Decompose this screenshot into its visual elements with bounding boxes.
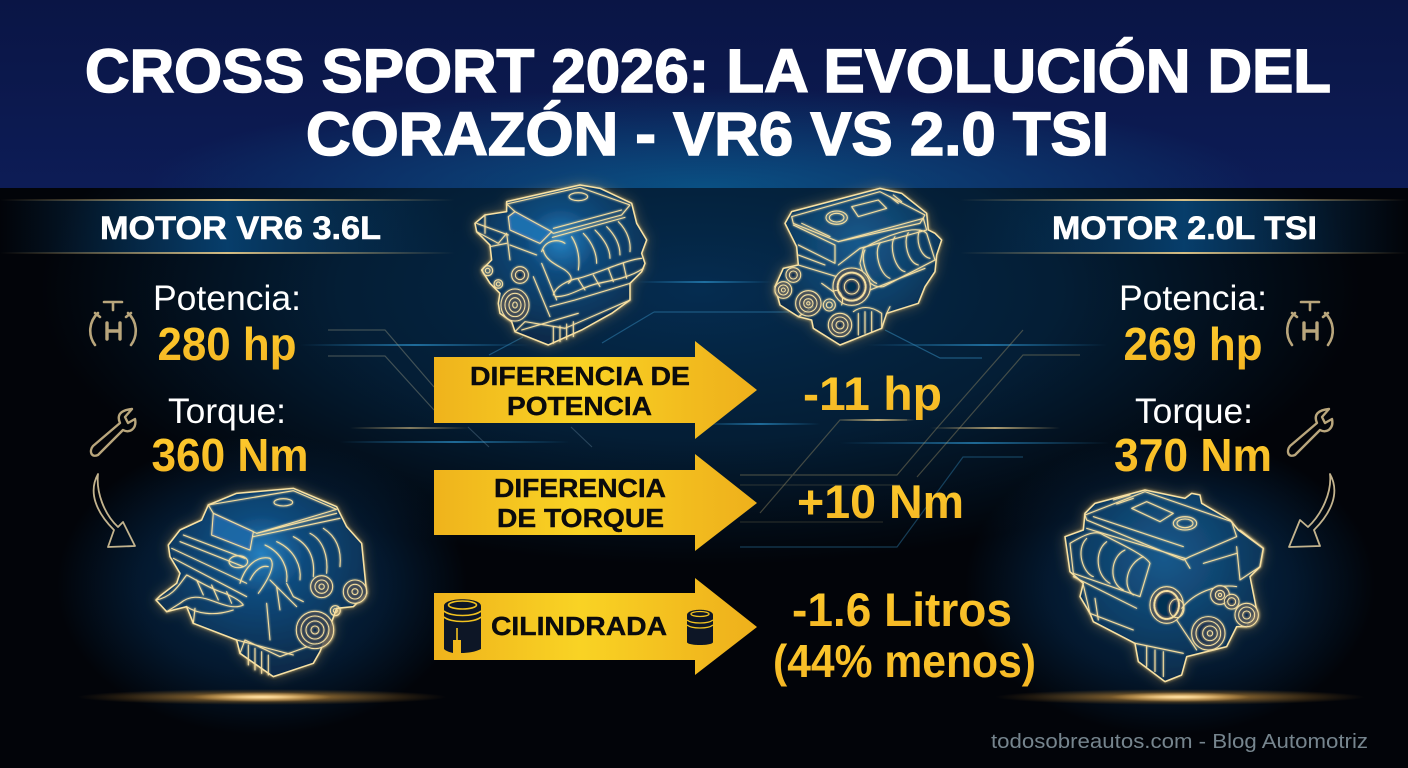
arrow: diferencia de potencia: POTENCIA xyxy=(507,391,652,421)
stat: potencia: 280 hp xyxy=(158,318,296,370)
arrow: curved left xyxy=(94,474,135,547)
value: cilindrada: -1.6 Litros xyxy=(792,583,1012,636)
icon: stopwatch xyxy=(90,302,136,345)
heading: motor TSI: MOTOR 2.0L TSI xyxy=(1052,210,1317,246)
stat: torque right xyxy=(1114,392,1272,481)
stat: torque: Torque: xyxy=(168,392,286,431)
value: +10 Nm: +10 Nm xyxy=(797,475,964,528)
stat: potencia: Potencia: xyxy=(153,279,301,318)
value: cilindrada: (44% menos) xyxy=(773,635,1036,687)
icon: small piston xyxy=(687,610,713,645)
arrow: diferencia de potencia: DIFERENCIA DE xyxy=(470,361,690,391)
heading: motor TSI xyxy=(960,199,1408,254)
arrow: cilindrada: CILINDRADA xyxy=(491,611,667,641)
stat: torque right: Torque: xyxy=(1135,392,1253,431)
stat: torque: 360 Nm xyxy=(152,429,308,481)
arrow: diferencia de torque xyxy=(434,454,757,551)
panel: motor 2.0 TSI xyxy=(960,199,1408,705)
header banner xyxy=(0,0,1408,188)
icon: wrench xyxy=(91,409,135,456)
arrow: diferencia de torque: DE TORQUE xyxy=(497,503,664,533)
floor glow right xyxy=(995,689,1365,705)
stat: potencia right xyxy=(1119,279,1267,370)
icon: wrench right xyxy=(1288,409,1332,456)
icon: engine TSI large xyxy=(1065,490,1263,682)
heading: motor VR6 xyxy=(0,199,455,254)
stat: potencia right: 269 hp xyxy=(1124,318,1262,370)
panel: motor VR6 xyxy=(0,199,455,705)
arrow: cilindrada xyxy=(434,578,757,675)
value: -11 hp: -11 hp xyxy=(803,367,942,420)
circuit lines background xyxy=(300,281,1110,547)
title xyxy=(85,37,1331,168)
floor glow left xyxy=(77,689,447,705)
title: CROSS SPORT 2026: LA EVOLUCIÓN DEL xyxy=(85,37,1331,105)
stat: torque right: 370 Nm xyxy=(1114,429,1272,481)
arrow: curved right xyxy=(1289,474,1334,547)
watermark: todosobreautos.com - Blog Automotriz xyxy=(991,731,1368,753)
icon: large piston xyxy=(444,599,481,653)
stat: torque xyxy=(152,392,308,481)
icon: engine VR6 large xyxy=(156,488,367,677)
arrow: diferencia de potencia xyxy=(434,341,757,439)
title: CORAZÓN - VR6 VS 2.0 TSI xyxy=(306,100,1109,168)
stat: potencia right: Potencia: xyxy=(1119,279,1267,318)
arrow: diferencia de torque: DIFERENCIA xyxy=(494,473,666,503)
heading: motor VR6: MOTOR VR6 3.6L xyxy=(100,210,381,246)
icon: engine TSI top xyxy=(775,188,942,345)
icon: engine VR6 top xyxy=(475,185,647,345)
icon: stopwatch right xyxy=(1287,302,1333,345)
stat: potencia xyxy=(153,279,301,370)
value: cilindrada xyxy=(773,583,1036,687)
